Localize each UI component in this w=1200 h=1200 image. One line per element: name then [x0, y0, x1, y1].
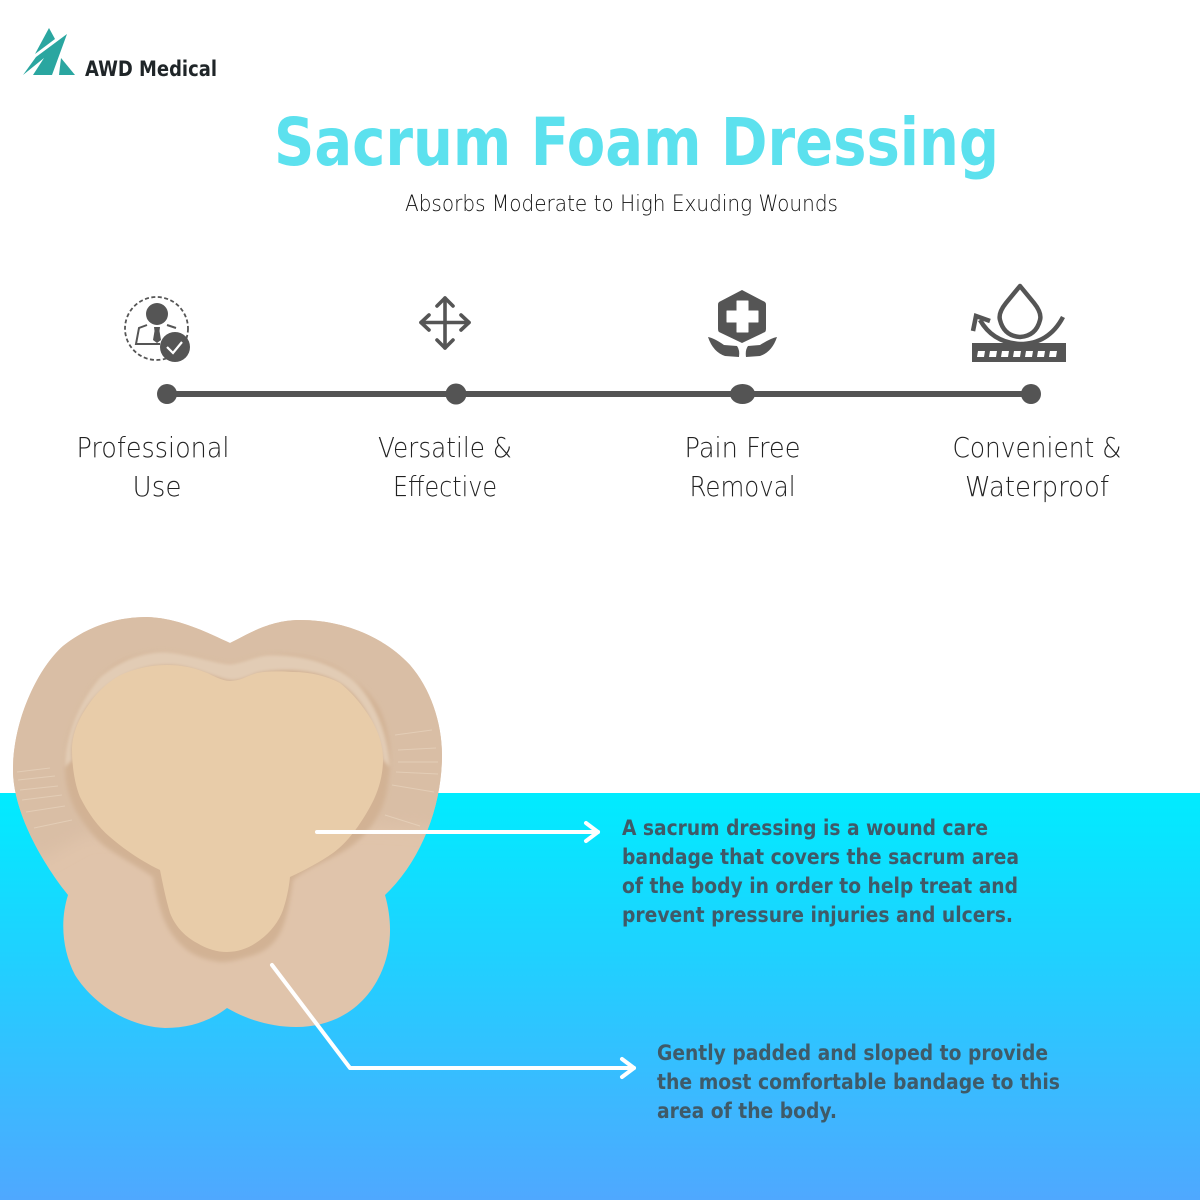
label: Professional Use — [76, 431, 230, 503]
label: Versatile & Effective: Versatile & — [378, 431, 512, 464]
label: Professional Use: Professional — [76, 431, 230, 464]
label: Pain Free Removal — [684, 431, 800, 503]
white edge strip beside dressing — [436, 725, 444, 780]
callout text: sacrum dressing description: prevent pressure injuries and ulcers. — [622, 903, 1013, 927]
product: sacrum foam dressing — [13, 617, 442, 1028]
callout text: sacrum dressing description: bandage that covers the sacrum area — [622, 845, 1019, 869]
callout arrow: bottom — [272, 965, 634, 1077]
label: Pain Free Removal: Pain Free — [684, 431, 800, 464]
label: Convenient & Waterproof: Waterproof — [965, 470, 1109, 503]
callout text: padded description: area of the body. — [657, 1099, 837, 1123]
timeline — [157, 384, 1041, 404]
callout text: padded description: Gently padded and sloped to provide — [657, 1041, 1048, 1065]
label: Pain Free Removal: Removal — [690, 470, 796, 503]
label: Professional Use: Use — [132, 470, 182, 503]
raised border pale top — [65, 652, 390, 767]
label: Versatile & Effective — [378, 431, 512, 503]
dressing outer border — [13, 617, 442, 1028]
logo wordmark: AWD Medical — [85, 57, 217, 81]
icon: teal mountain logo — [23, 28, 75, 75]
callout text: sacrum dressing description: A sacrum dressing is a wound care — [622, 816, 988, 840]
logo: AWD Medical — [23, 28, 217, 81]
callout text: sacrum dressing description: of the body in order to help treat and — [622, 874, 1018, 898]
callout text: padded description — [657, 1041, 1060, 1123]
label: Convenient & Waterproof: Convenient & — [952, 431, 1122, 464]
label: Convenient & Waterproof — [952, 431, 1122, 503]
upper textured tan band — [13, 617, 442, 863]
label: Versatile & Effective: Effective — [393, 470, 497, 503]
icon: professional with check — [125, 297, 190, 362]
icon: waterproof drop — [972, 286, 1066, 362]
crinkle texture lines — [17, 730, 438, 828]
callout text: padded description: the most comfortable bandage to this — [657, 1070, 1060, 1094]
background gradient panel — [0, 793, 1200, 1200]
raised border soft shadow — [65, 652, 390, 962]
icon: shield cross held by hands — [708, 290, 777, 357]
subtitle: Absorbs Moderate to High Exuding Wounds — [405, 192, 838, 217]
title: Sacrum Foam Dressing — [274, 104, 999, 181]
callout arrow: top — [317, 823, 598, 841]
icon: four-way arrows — [421, 298, 469, 348]
callout text: sacrum dressing description — [622, 816, 1019, 927]
central foam pad — [72, 665, 383, 952]
